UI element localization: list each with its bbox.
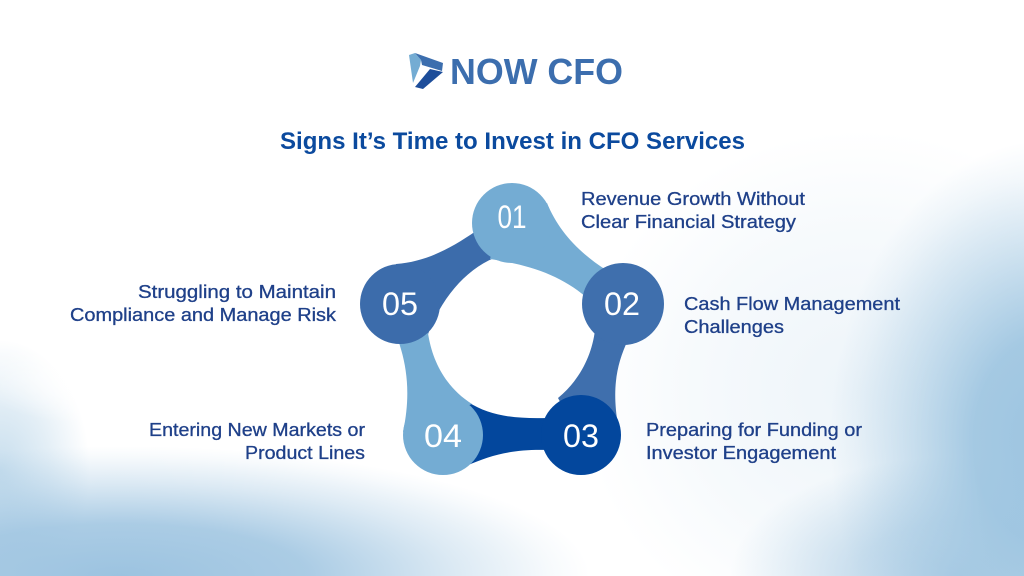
node 05 [360,264,440,344]
icon: logo arrow mark [409,53,443,89]
label 03: Investor Engagement [646,443,836,463]
label 03: Preparing for Funding or [646,420,862,440]
connector 01 to 02 [490,203,606,297]
label 05 [70,282,337,325]
node 02 [582,263,664,345]
connector 05 to 04 [398,333,472,432]
label 01 [581,189,805,232]
connector 04 to 03 [466,402,548,466]
label 04 [149,420,365,463]
node 05: 05 [382,286,418,322]
label 05: Compliance and Manage Risk [70,305,337,325]
label 05: Struggling to Maintain [138,282,336,302]
logo wordmark: NOW CFO [450,51,623,92]
node 04 [403,395,483,475]
label 01: Clear Financial Strategy [581,212,796,232]
label 04: Entering New Markets or [149,420,365,440]
label 03 [646,420,862,463]
label 04: Product Lines [245,443,365,463]
label 01: Revenue Growth Without [581,189,805,209]
connector 05 to 01 [395,231,494,337]
label 02: Challenges [684,317,784,337]
pentagon cycle diagram [360,183,664,475]
node 01: 01 [498,199,526,235]
node 02: 02 [604,286,640,322]
connector 02 to 03 [558,330,628,425]
node 04: 04 [424,418,462,454]
node 03 [541,395,621,475]
label 02 [684,294,900,337]
logo: NOW CFO [409,51,623,92]
node 03: 03 [563,418,599,454]
title: Signs It’s Time to Invest in CFO Services [280,128,745,155]
node 01 [472,183,552,263]
label 02: Cash Flow Management [684,294,900,314]
